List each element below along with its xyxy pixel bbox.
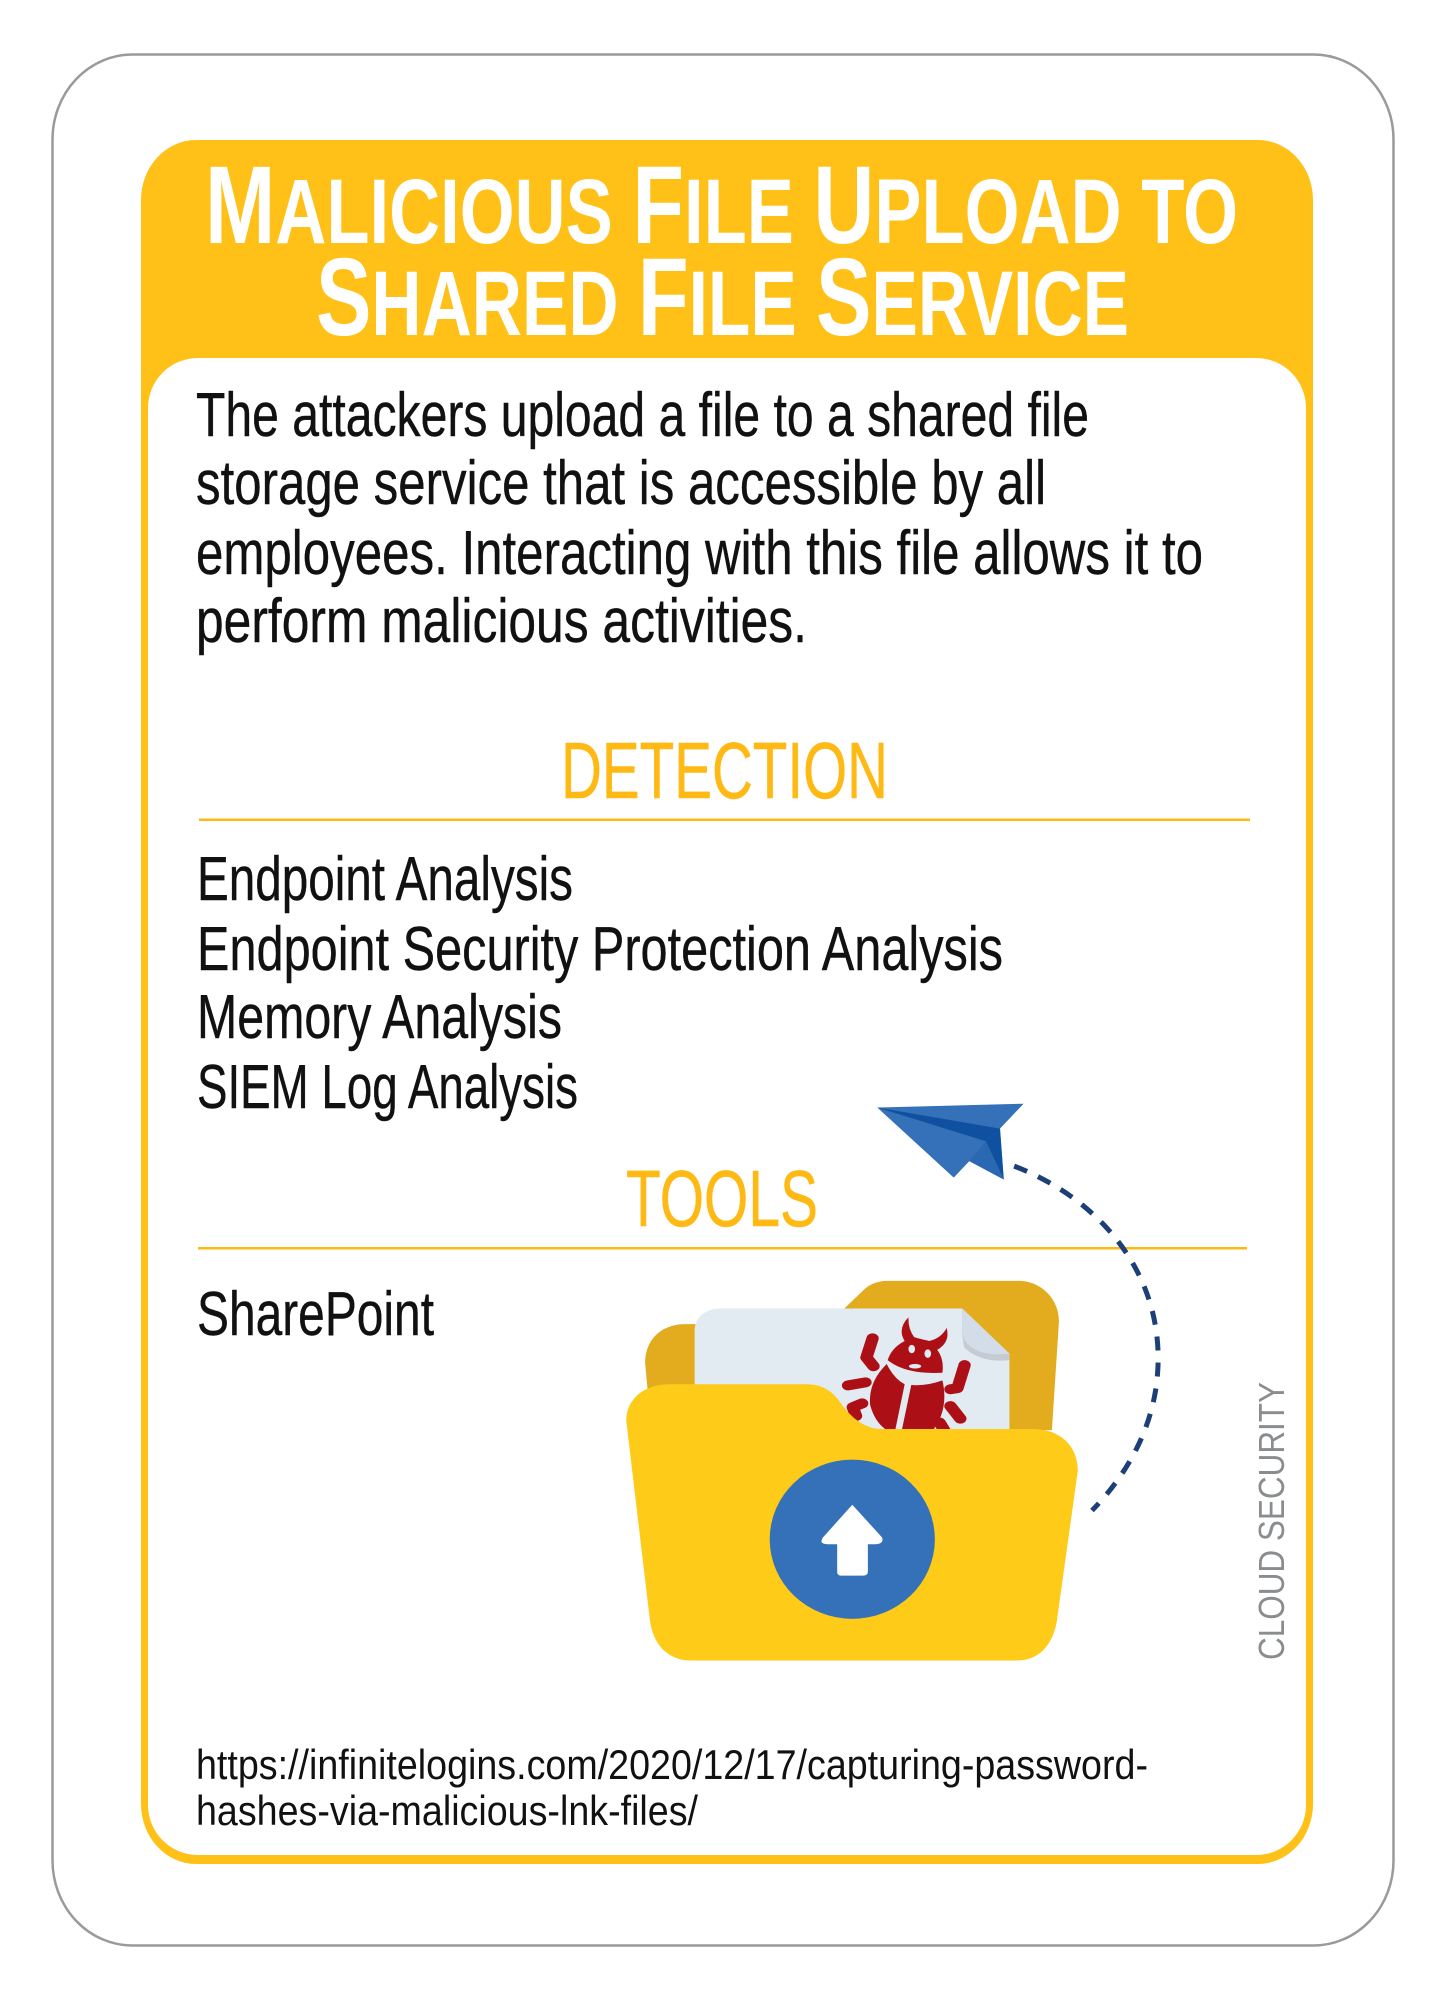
icon: red bug bbox=[848, 1317, 965, 1430]
icon: upload arrow bbox=[821, 1505, 882, 1576]
title: SHARED FILE SERVICE bbox=[316, 236, 1129, 359]
detection list: Endpoint Analysis bbox=[197, 845, 573, 914]
description text: storage service that is accessible by all bbox=[196, 449, 1046, 518]
heading: detection: DETECTION bbox=[561, 726, 888, 815]
title bbox=[205, 144, 1238, 359]
source url: https://infinitelogins.com/2020/12/17/capturing-password- bbox=[196, 1741, 1148, 1788]
folder front bbox=[626, 1384, 1078, 1661]
icon: paper sheet bbox=[695, 1308, 1009, 1430]
source url: hashes-via-malicious-lnk-files/ bbox=[196, 1787, 698, 1834]
description text: perform malicious activities. bbox=[196, 587, 807, 656]
illustration: folder, bug and paper plane bbox=[626, 1104, 1158, 1661]
detection list: SIEM Log Analysis bbox=[197, 1053, 578, 1122]
source url bbox=[196, 1741, 1148, 1834]
icon: dashed flight path bbox=[1014, 1166, 1158, 1511]
description text: The attackers upload a file to a shared file bbox=[196, 381, 1089, 450]
description text: employees. Interacting with this file allows it to bbox=[196, 519, 1203, 588]
detection list: Endpoint Security Protection Analysis bbox=[197, 915, 1003, 984]
panel: yellow frame bbox=[141, 140, 1313, 1864]
folder back bbox=[645, 1281, 1059, 1430]
icon: paper plane bbox=[877, 1104, 1024, 1180]
side label: CLOUD SECURITY bbox=[1251, 1382, 1292, 1660]
tools list: SharePoint bbox=[197, 1280, 434, 1349]
description text bbox=[196, 381, 1203, 656]
upload badge bbox=[770, 1460, 935, 1619]
title: MALICIOUS FILE UPLOAD TO bbox=[205, 144, 1238, 267]
detection list: Memory Analysis bbox=[197, 983, 562, 1052]
detection list bbox=[197, 845, 1003, 1122]
panel: white content bbox=[148, 358, 1306, 1855]
heading: tools: TOOLS bbox=[626, 1154, 818, 1243]
